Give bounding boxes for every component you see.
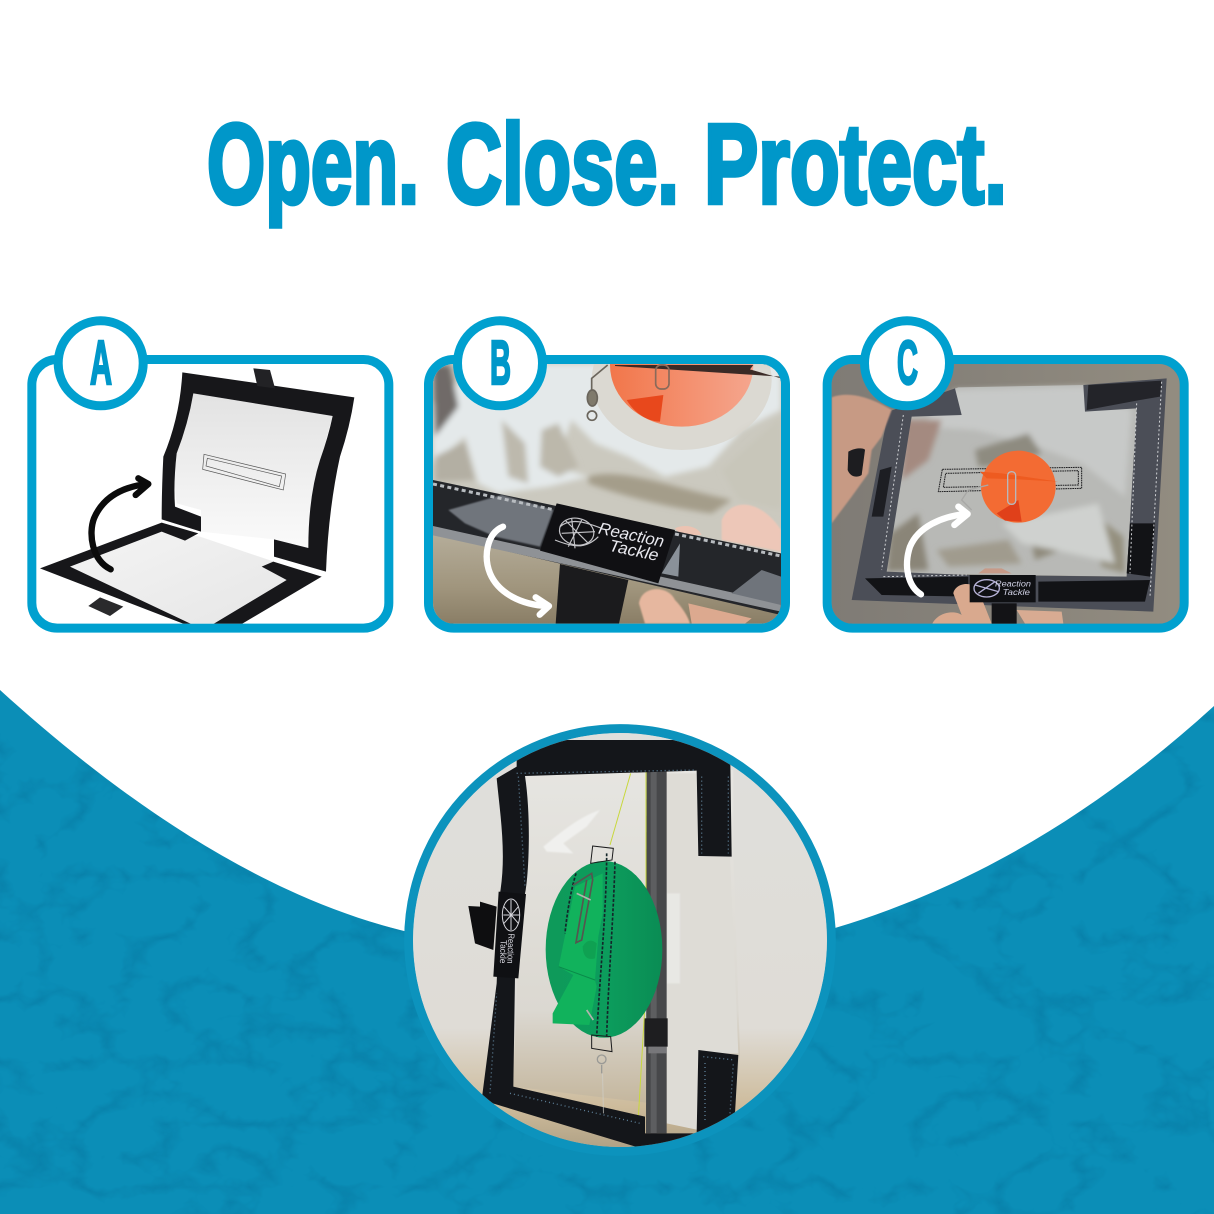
- paperclip: [573, 873, 593, 943]
- brand label: [970, 575, 1036, 602]
- arrow: [487, 527, 549, 615]
- photo: orange disc: [610, 364, 780, 427]
- brand label: [493, 892, 526, 978]
- photo: webbing strap: [556, 564, 628, 624]
- panel B: closing the wallet: [424, 355, 790, 633]
- brand label: Reaction: [505, 933, 516, 964]
- title: Close.: [446, 101, 679, 227]
- photo: stitched sleeve slot: [938, 467, 1082, 492]
- photo: blurred background: [832, 364, 1180, 624]
- velcro tab: [468, 902, 497, 950]
- panel C: protecting the rig: [827, 359, 1184, 628]
- badge C: [864, 321, 950, 406]
- badge B: [458, 321, 542, 406]
- brand label: Tackle: [1003, 587, 1030, 597]
- fishing line: [610, 770, 646, 1123]
- photo: table below strip: [433, 533, 781, 624]
- black vinyl frame: [482, 740, 738, 1150]
- green float fin: [553, 873, 603, 1025]
- stitched sleeve ends: [591, 846, 613, 1052]
- brand label: [540, 503, 675, 583]
- arrow: [92, 478, 148, 569]
- sleeve slot: [203, 454, 286, 490]
- badge A: [58, 321, 143, 406]
- badge B: B: [490, 329, 511, 398]
- clear vinyl window: [514, 1016, 740, 1114]
- photo: bottom fingers: [932, 568, 1063, 627]
- brand label: Tackle: [498, 940, 509, 964]
- photo: black patches on frame: [865, 381, 1162, 602]
- photo: swivel wire: [962, 485, 988, 510]
- photo: reflections: [887, 387, 1132, 573]
- swivel: [597, 1055, 606, 1113]
- photo: orange disc: [980, 451, 1058, 523]
- badge C: C: [897, 329, 918, 398]
- green float disc: [546, 853, 662, 1038]
- photo: vinyl frame: [852, 378, 1167, 612]
- title: [207, 101, 1007, 227]
- badge A: A: [90, 329, 112, 398]
- circular photo: wallet with green float: [400, 720, 840, 1160]
- stitched threads over float: [565, 853, 615, 1037]
- brand label: Tackle: [607, 536, 660, 565]
- blurred background: [413, 733, 827, 1147]
- frame stitching: [490, 770, 735, 1123]
- upper flap black frame: [162, 372, 354, 572]
- photo: reflections: [433, 364, 781, 513]
- lower flap black frame: [40, 523, 322, 625]
- photo: vinyl window: [883, 385, 1137, 577]
- title: Open.: [207, 101, 419, 227]
- photo: swivel and clip: [587, 365, 669, 420]
- background: teal curved section: [0, 690, 1214, 1214]
- photo: dark vinyl strip: [433, 480, 781, 615]
- title: Protect.: [704, 101, 1007, 227]
- panel A: opening the wallet: [32, 359, 389, 628]
- product photo: lower flap window: [70, 532, 287, 625]
- brand label: Reaction: [995, 579, 1031, 589]
- photo: fingers: [639, 505, 781, 624]
- photo: frame stitching: [882, 382, 1162, 597]
- vertical rod: [646, 770, 667, 1133]
- product photo: upper flap window: [175, 394, 332, 526]
- photo: left hand: [832, 395, 892, 523]
- photo: clear vinyl background: [433, 364, 781, 551]
- photo: translucent disc halo: [592, 364, 772, 450]
- arrow: [907, 507, 968, 594]
- brand label: Reaction: [597, 519, 666, 551]
- upper flap tab: [253, 368, 275, 388]
- lower flap tab: [88, 597, 123, 616]
